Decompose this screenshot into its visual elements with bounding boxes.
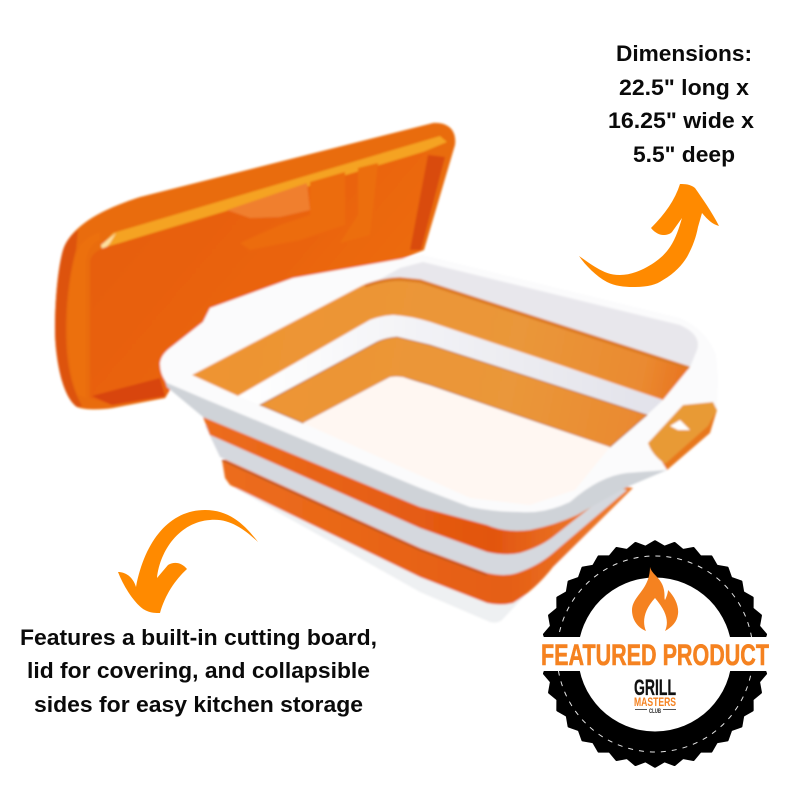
grill masters club logo: CLUB — [649, 709, 661, 715]
banner strip — [530, 637, 780, 671]
ring top shadow strip — [365, 279, 689, 368]
arrow pointing to product — [118, 510, 258, 613]
features text — [20, 625, 377, 717]
dimensions text: 5.5" deep — [633, 142, 735, 167]
tub rim top — [160, 255, 718, 512]
dimensions text — [608, 41, 755, 167]
inner orange collapsible ring — [260, 337, 647, 447]
lid — [55, 123, 455, 409]
outer orange collapsible ring — [192, 278, 690, 400]
arrow pointing to dimensions — [579, 184, 719, 287]
grill masters club logo: MASTERS — [634, 695, 676, 709]
dimensions text: Dimensions: — [616, 41, 752, 66]
badge scalloped seal — [511, 518, 799, 790]
cutting board — [303, 376, 610, 505]
features text: Features a built-in cutting board, — [20, 625, 377, 650]
dimensions text: 22.5" long x — [619, 75, 750, 100]
grill masters club logo: GRILL — [634, 675, 676, 700]
handle — [648, 402, 717, 470]
grill masters club logo — [634, 675, 676, 715]
rim back inner shading — [375, 262, 698, 367]
features text: lid for covering, and collapsible — [27, 658, 370, 683]
product photo: collapsible tub with lid — [55, 123, 718, 623]
flame icon — [632, 567, 678, 631]
tub rim underside — [160, 340, 667, 531]
middle white band — [238, 315, 663, 415]
dimensions text: 16.25" wide x — [608, 108, 755, 133]
tub body: collapsed side walls — [203, 417, 633, 623]
featured product badge — [511, 518, 799, 790]
features text: sides for easy kitchen storage — [34, 692, 363, 717]
